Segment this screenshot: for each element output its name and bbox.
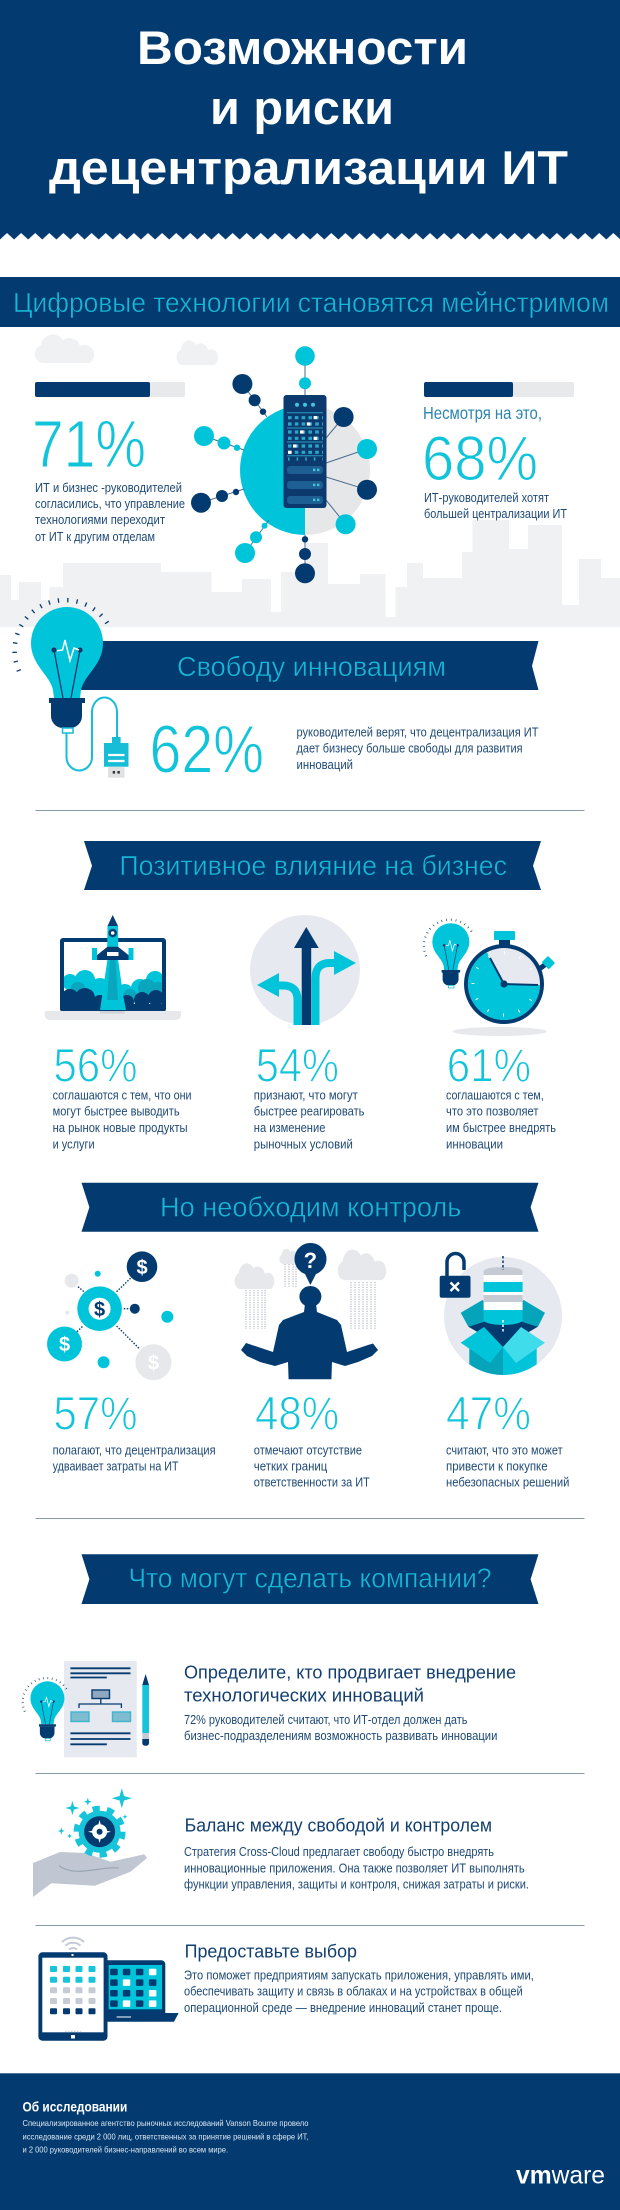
text: define who drives innovation [184, 1662, 516, 1743]
text: balance between freedom and control: инновационные приложения. Она также позволяет ИТ выполнять [184, 1861, 525, 1875]
banner: positive impact: Позитивное влияние на бизнес [119, 850, 507, 881]
text: provide choice: обеспечивать защиту и связь в облаках и на устройствах в общей [184, 1985, 523, 1999]
stat: 62%: дает бизнесу больше свободы для развития [296, 742, 522, 756]
stat: 62%: руководителей верят, что децентрализация ИТ [296, 726, 539, 740]
about the study text: и 2 000 руководителей бизнес-направлений во всем мире. [22, 2145, 228, 2154]
icon: server hub [191, 346, 377, 583]
stat: 71%: технологиями переходит [35, 513, 165, 527]
text: provide choice: Это поможет предприятиям запускать приложения, управлять ими, [184, 1968, 534, 1982]
stat: 62%: 62% [150, 712, 264, 788]
stat: 61% [446, 1039, 556, 1151]
stat: 54%: рыночных условий [254, 1137, 353, 1151]
stat: 56%: соглашаются с тем, что они [53, 1088, 192, 1102]
text: balance between freedom and control [184, 1816, 529, 1892]
icon: money network: $ [148, 1352, 159, 1374]
text: balance between freedom and control: функции управления, защиты и контроля, снижая затраты и риски. [184, 1878, 529, 1892]
icon: bulb and stopwatch [424, 920, 555, 1036]
banner: what companies can do [82, 1554, 538, 1604]
stat: 68%: ИТ-руководителей хотят [424, 491, 549, 505]
stat: 48%: четких границ [254, 1460, 327, 1474]
stat: 61%: соглашаются с тем, [446, 1088, 544, 1102]
stat: 71%: согласились, что управление [35, 497, 185, 511]
stat: 57%: 57% [53, 1386, 138, 1439]
about the study text: Специализированное агентство рыночных исследований Vanson Bourne провело [22, 2119, 309, 2128]
stat: 61%: 61% [447, 1039, 531, 1092]
banner: what companies can do: Что могут сделать компании? [128, 1563, 492, 1594]
stat: 57%: полагают, что децентрализация [53, 1443, 216, 1457]
icon: money network [47, 1251, 173, 1380]
text: provide choice: Предоставьте выбор [185, 1942, 357, 1962]
stat: 54%: 54% [256, 1039, 339, 1092]
icon: open lock and data box [440, 1254, 562, 1376]
stat: 47%: 47% [446, 1386, 531, 1439]
stat: 68%: 68% [422, 424, 538, 494]
stat: 56%: на рынок новые продукты [53, 1121, 188, 1135]
stat: 48% [254, 1386, 370, 1490]
icon: hand holding gear [33, 1788, 147, 1897]
stat: 61%: им быстрее внедрять [446, 1121, 556, 1135]
stat: 62%: инноваций [296, 758, 353, 772]
about the study text: исследование среди 2 000 лиц, ответственных за принятие решений в сфере ИТ, [22, 2132, 308, 2141]
text: balance between freedom and control: Баланс между свободой и контролем [185, 1816, 492, 1836]
stat: 48%: ответственности за ИТ [254, 1476, 370, 1490]
stat: 54% [254, 1039, 364, 1151]
stat: 56%: и услуги [53, 1137, 95, 1151]
title [49, 21, 568, 194]
title: Возможности [137, 21, 468, 74]
text: define who drives innovation: Определите, кто продвигает внедрение [184, 1662, 516, 1682]
about the study heading: Об исследовании [22, 2099, 127, 2115]
icon: person with clouds and question: ? [304, 1248, 317, 1273]
stat: 57% [53, 1386, 216, 1474]
stat: 56%: 56% [53, 1039, 138, 1092]
header panel [0, 0, 620, 240]
stat: 62% [150, 712, 539, 788]
cityscape background [0, 520, 620, 627]
stat: 48%: 48% [255, 1386, 339, 1439]
vmware logo: vmware [516, 2161, 605, 2189]
stat: 68%: большей централизации ИТ [424, 507, 567, 521]
stat: 71% [32, 382, 185, 544]
stat: 47%: считают, что это может [446, 1443, 563, 1457]
text: define who drives innovation: 72% руководителей считают, что ИТ-отдел должен дать [184, 1713, 467, 1727]
stat: 54%: на изменение [254, 1121, 325, 1135]
stat: 61%: инновации [446, 1137, 503, 1151]
banner: control needed: Но необходим контроль [160, 1192, 461, 1223]
stat: 68%: Несмотря на это, [423, 403, 542, 423]
stat: 57%: удваивает затраты на ИТ [53, 1460, 179, 1474]
text: provide choice: операционной среде — внедрение инноваций станет проще. [184, 2001, 502, 2015]
stat: 48%: отмечают отсутствие [254, 1443, 362, 1457]
icon: rocket launching from laptop [45, 915, 181, 1020]
banner: freedom of innovation: Свободу инновациям [177, 651, 446, 682]
band heading: digital mainstream [0, 277, 620, 327]
banner: positive impact [84, 841, 541, 890]
text: balance between freedom and control: Стратегия Cross-Cloud предлагает свободу быстро внедрять [184, 1845, 494, 1859]
icon: document with org chart, bulb, pencil [23, 1661, 149, 1757]
icon: money network: $ [59, 1334, 70, 1356]
stat: 47% [446, 1386, 569, 1490]
icon: light bulb with usb cable [15, 600, 128, 778]
stat: 71%: 71% [32, 407, 146, 482]
icon: direction arrows [250, 915, 360, 1025]
text: define who drives innovation: бизнес-подразделениям возможность развивать инновации [184, 1729, 497, 1743]
stat: 56% [53, 1039, 192, 1151]
banner: freedom of innovation [75, 641, 538, 690]
stat: 56%: могут быстрее выводить [53, 1105, 180, 1119]
text: provide choice [184, 1942, 534, 2015]
clouds [35, 335, 218, 365]
stat: 47%: небезопасных решений [446, 1476, 569, 1490]
icon: money network: $ [136, 1257, 148, 1279]
stat: 47%: привести к покупке [446, 1460, 548, 1474]
title: и риски [210, 81, 394, 134]
footer panel [0, 2073, 620, 2210]
icon: money network: $ [94, 1299, 105, 1321]
banner: control needed [82, 1183, 538, 1232]
about the study text [22, 2119, 309, 2154]
stat: 61%: что это позволяет [446, 1105, 539, 1119]
stat: 54%: признают, что могут [254, 1088, 358, 1102]
icon: person with clouds and question [235, 1243, 386, 1379]
text: define who drives innovation: технологических инноваций [184, 1686, 424, 1706]
stat: 68% [422, 382, 574, 521]
stat: 71%: от ИТ к другим отделам [35, 530, 155, 544]
stat: 71%: ИТ и бизнес -руководителей [35, 481, 182, 495]
stat: 54%: быстрее реагировать [254, 1105, 364, 1119]
title: децентрализации ИТ [49, 141, 568, 194]
icon: tablet and laptop with wifi [38, 1938, 179, 2041]
